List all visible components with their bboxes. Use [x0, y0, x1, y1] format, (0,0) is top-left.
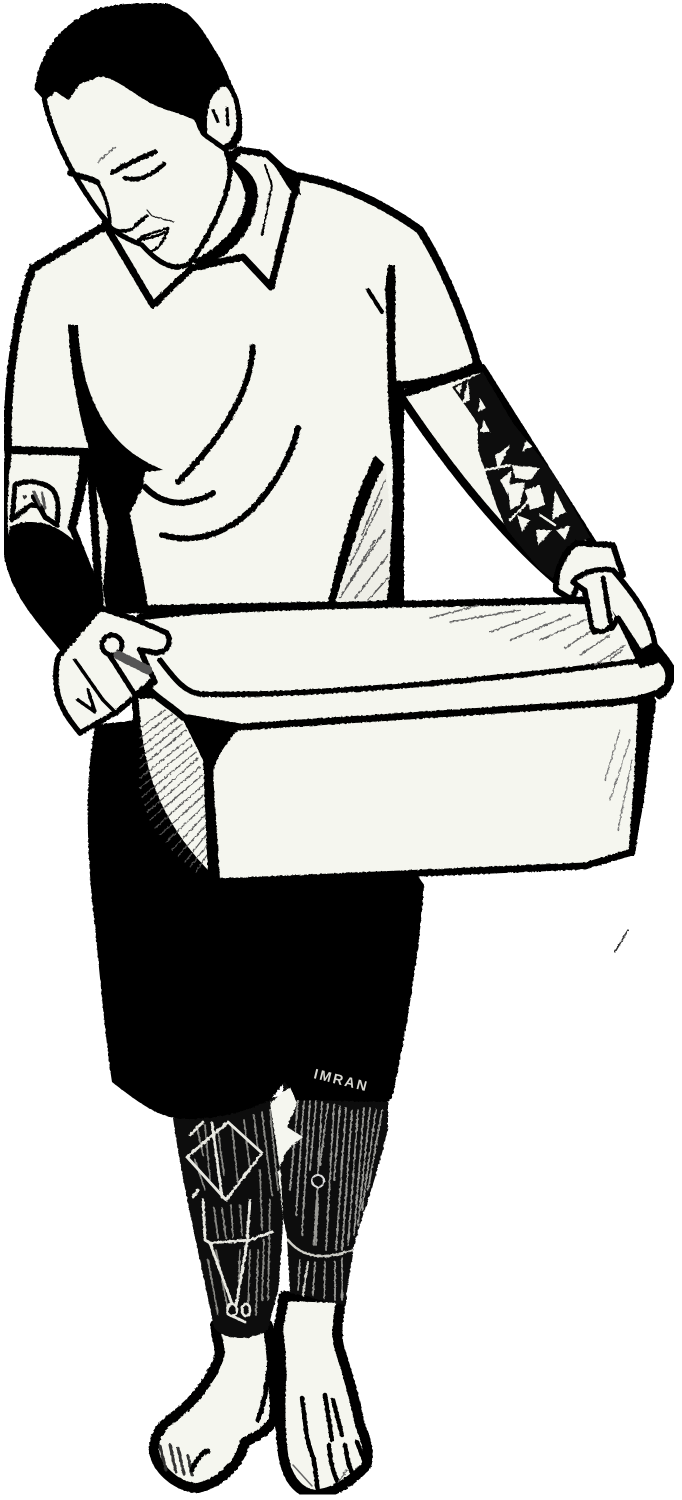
- right calf tattoo: [283, 1080, 388, 1305]
- box right edge: [628, 700, 656, 856]
- torso shadow left: [68, 325, 163, 610]
- left hand on lid: [56, 608, 169, 733]
- left calf tattoo: [173, 1095, 287, 1338]
- black forearm sleeve: [6, 522, 103, 652]
- wrist cuff: [556, 543, 623, 600]
- hair: [35, 3, 242, 150]
- left arm: [4, 448, 103, 652]
- right foot: [278, 1296, 368, 1494]
- eyes, nose and mouth: [70, 147, 174, 252]
- shirt folds: [145, 290, 382, 538]
- legs with tattoos: [154, 1080, 388, 1494]
- polo shirt: [8, 150, 478, 610]
- bird tattoo: [12, 482, 58, 525]
- box corner edge: [183, 720, 240, 880]
- torso shadow right: [328, 265, 404, 603]
- collar: [105, 150, 301, 305]
- box lid: [140, 600, 674, 727]
- arm tattoo: [452, 372, 590, 580]
- right hand on lid: [573, 570, 662, 668]
- face: [44, 74, 230, 267]
- black shorts: [88, 700, 424, 1119]
- box left face hatching: [140, 710, 207, 872]
- small stray mark: [615, 930, 628, 952]
- left foot: [154, 1325, 275, 1488]
- right arm: [400, 368, 623, 600]
- box body: [135, 695, 652, 882]
- head: [35, 3, 242, 267]
- ear: [207, 86, 236, 148]
- tattoo word: IMRAN: [312, 1065, 369, 1094]
- gap between the legs: [270, 1087, 303, 1217]
- plastic box: [56, 570, 674, 882]
